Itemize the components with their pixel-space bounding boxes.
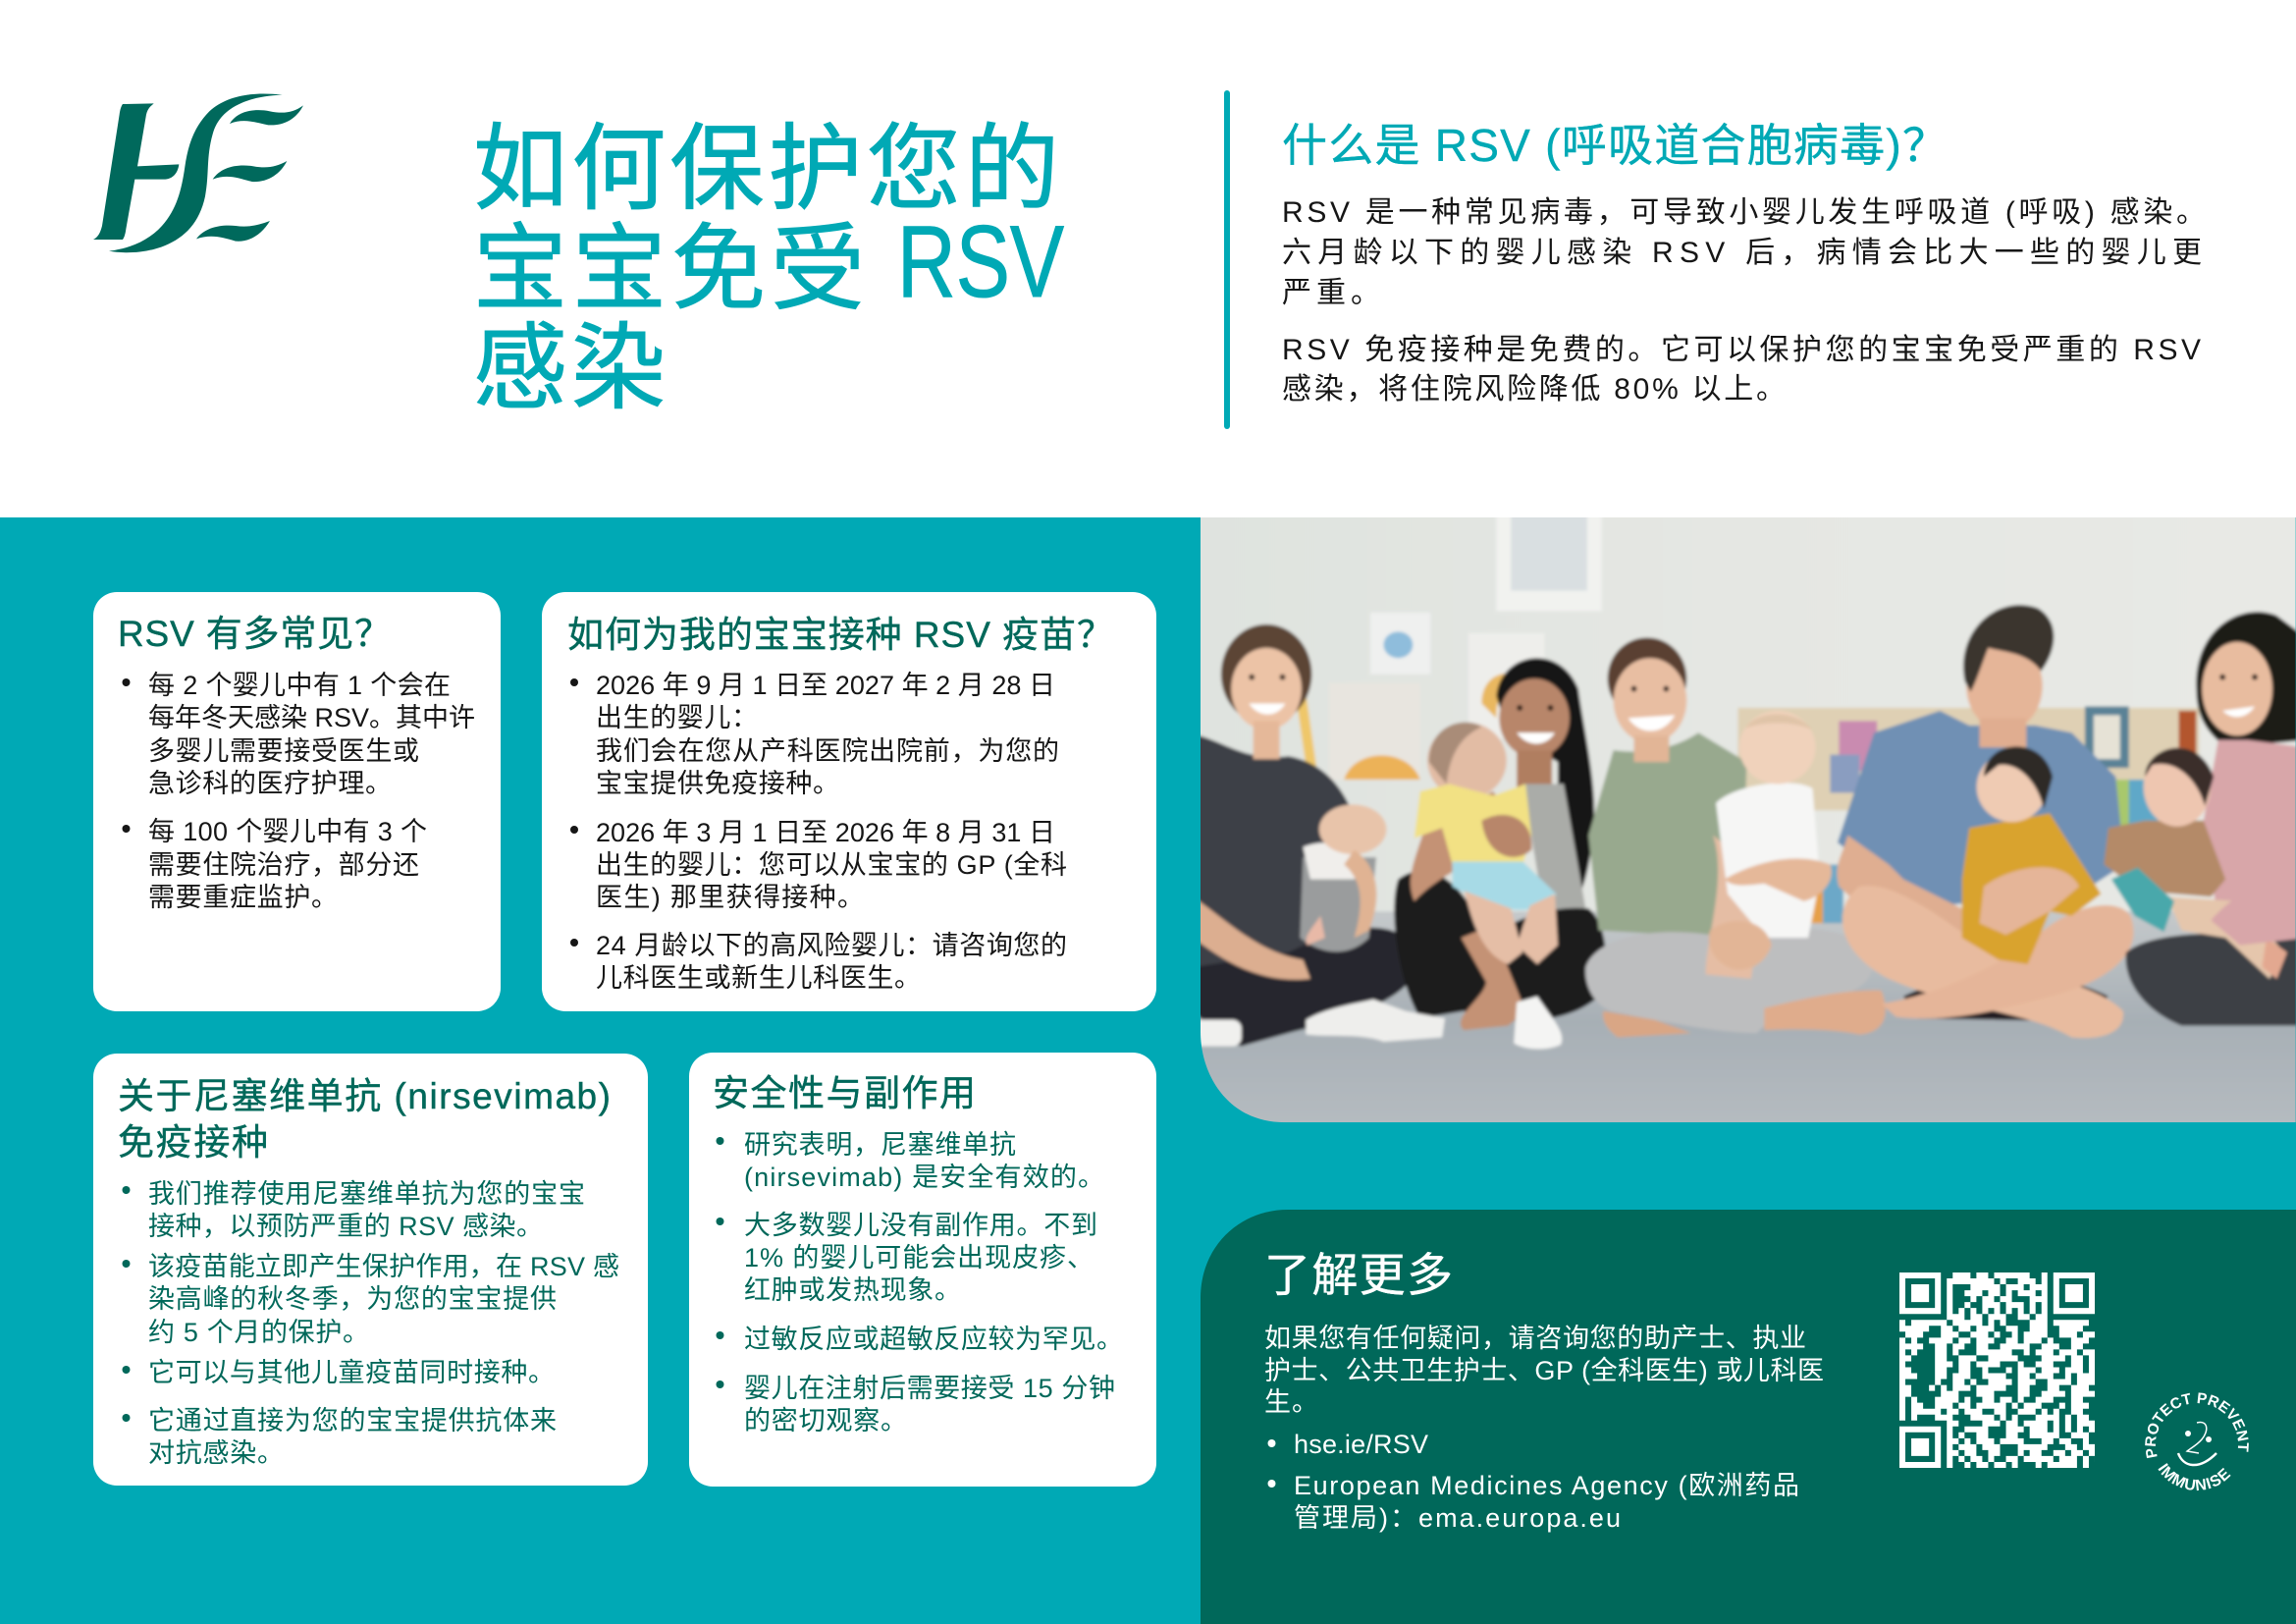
bullets: how common xyxy=(122,671,475,912)
person 2 xyxy=(1496,658,1594,896)
bullets: about nirsevimab: 该疫苗能立即产生保护作用，在 RSV 感 xyxy=(148,1252,619,1281)
bullets: how common: 多婴儿需要接受医生或 xyxy=(148,736,419,766)
bullets: safety: 红肿或发热现象。 xyxy=(744,1275,961,1305)
text block: RSV description: 感染，将住院风险降低 80% 以上。 xyxy=(1282,373,1786,406)
bullets: how common: 急诊科的医疗护理。 xyxy=(148,769,392,798)
bullets: about nirsevimab: 我们推荐使用尼塞维单抗为您的宝宝 xyxy=(148,1179,585,1209)
bullets: how to immunise: 2026 年 9 月 1 日至 2027 年 2 月 28 日 xyxy=(596,671,1055,700)
title: RSV xyxy=(897,205,1064,319)
panel: safety and side effects xyxy=(689,1053,1156,1487)
icon: Protect Prevent Immunise badge: IMMUNISE xyxy=(2158,1463,2230,1490)
bullets: how common: 每 2 个婴儿中有 1 个会在 xyxy=(148,671,451,700)
bullets: how to immunise: 出生的婴儿：您可以从宝宝的 GP (全科 xyxy=(596,850,1067,880)
QR code xyxy=(1899,1272,2101,1468)
bullets: about nirsevimab xyxy=(122,1179,619,1468)
text block: RSV description xyxy=(1282,196,2206,406)
bullets: how to immunise: 儿科医生或新生儿科医生。 xyxy=(596,963,921,993)
title xyxy=(473,117,1064,421)
bullets: links xyxy=(1268,1430,1799,1533)
heading: what is RSV: 什么是 RSV (呼吸道合胞病毒)？ xyxy=(1282,120,1948,171)
text block: RSV description: 严重。 xyxy=(1282,277,1380,309)
icon: Protect Prevent Immunise badge: PROTECT PREVENT xyxy=(2145,1392,2249,1459)
text block: contact details xyxy=(1264,1324,1824,1417)
heading: about nirsevimab: 关于尼塞维单抗 (nirsevimab) xyxy=(118,1076,611,1116)
bullets: how to immunise: 24 月龄以下的高风险婴儿：请咨询您的 xyxy=(596,931,1067,960)
bullets: how common: 每 100 个婴儿中有 3 个 xyxy=(148,817,427,846)
text block: RSV description: RSV 免疫接种是免费的。它可以保护您的宝宝免受严重的 RSV xyxy=(1282,334,2201,366)
heading: how common: RSV 有多常见？ xyxy=(118,614,391,654)
bullets: how to immunise xyxy=(570,671,1067,993)
heading: safety: 安全性与副作用 xyxy=(713,1073,976,1113)
title: 宝宝免受 xyxy=(473,217,865,322)
icon: Protect Prevent Immunise badge xyxy=(2145,1392,2249,1490)
panel: how common is RSV xyxy=(93,592,501,1011)
bullets: safety xyxy=(717,1130,1123,1435)
bullets: how to immunise: 医生) 那里获得接种。 xyxy=(596,883,864,912)
text block: contact details: 生。 xyxy=(1264,1387,1318,1417)
text block: RSV description: RSV 是一种常见病毒，可导致小婴儿发生呼吸道 (呼吸) 感染。 xyxy=(1282,196,2206,229)
bullets: safety: 研究表明，尼塞维单抗 xyxy=(744,1130,1016,1160)
heading: how to immunise: 如何为我的宝宝接种 RSV 疫苗？ xyxy=(567,615,1113,655)
bullets: safety: 1% 的婴儿可能会出现皮疹、 xyxy=(744,1243,1094,1272)
heading: about nirsevimab xyxy=(118,1076,611,1163)
person 3 xyxy=(1588,732,1746,938)
panel: what is RSV xyxy=(1282,120,2206,406)
bullets: about nirsevimab: 它通过直接为您的宝宝提供抗体来 xyxy=(148,1406,557,1435)
bullets: safety: 大多数婴儿没有副作用。不到 xyxy=(744,1211,1097,1240)
HSE logo xyxy=(93,94,303,252)
bullets: how to immunise: 我们会在您从产科医院出院前，为您的 xyxy=(596,736,1059,766)
heading: find out more: 了解更多 xyxy=(1264,1249,1453,1301)
heading: about nirsevimab: 免疫接种 xyxy=(118,1122,268,1163)
text block: contact details: 如果您有任何疑问，请咨询您的助产士、执业 xyxy=(1264,1324,1806,1353)
person 5 xyxy=(2196,612,2296,747)
bullets: how to immunise: 2026 年 3 月 1 日至 2026 年 8 月 31 日 xyxy=(596,818,1055,847)
bullets: how to immunise: 出生的婴儿： xyxy=(596,703,758,732)
title: 如何保护您的 xyxy=(473,117,1059,222)
person 1 xyxy=(1194,734,1353,974)
bullets: about nirsevimab: 对抗感染。 xyxy=(148,1438,284,1468)
panel: how to immunise my baby xyxy=(542,592,1156,1011)
bullets: safety: (nirsevimab) 是安全有效的。 xyxy=(744,1163,1104,1192)
teal background band xyxy=(0,517,2296,1624)
bullets: about nirsevimab: 接种，以预防严重的 RSV 感染。 xyxy=(148,1212,543,1241)
bullets: links: European Medicines Agency (欧洲药品 xyxy=(1294,1471,1799,1500)
text block: contact details: 护士、公共卫生护士、GP (全科医生) 或儿科医 xyxy=(1264,1356,1824,1385)
bullets: safety: 的密切观察。 xyxy=(744,1406,907,1435)
bullets: how to immunise: 宝宝提供免疫接种。 xyxy=(596,769,839,798)
bullets: links: hse.ie/RSV xyxy=(1294,1430,1428,1459)
panel: about nirsevimab xyxy=(93,1054,648,1486)
panel: find out more xyxy=(1201,1210,2296,1624)
photo: parents with babies xyxy=(1194,511,2296,1131)
text block: RSV description: 六月龄以下的婴儿感染 RSV 后，病情会比大一些的婴儿更 xyxy=(1282,237,2202,269)
title: 感染 xyxy=(473,316,666,421)
bullets: how common: 需要住院治疗，部分还 xyxy=(148,850,419,880)
person 4 xyxy=(1838,711,2124,908)
bullets: safety: 婴儿在注射后需要接受 15 分钟 xyxy=(744,1374,1115,1403)
divider xyxy=(1224,90,1230,429)
bullets: about nirsevimab: 染高峰的秋冬季，为您的宝宝提供 xyxy=(148,1284,557,1314)
bullets: about nirsevimab: 约 5 个月的保护。 xyxy=(148,1318,369,1347)
bullets: how common: 需要重症监护。 xyxy=(148,883,338,912)
bullets: how common: 每年冬天感染 RSV。其中许 xyxy=(148,703,475,732)
bullets: about nirsevimab: 它可以与其他儿童疫苗同时接种。 xyxy=(148,1358,555,1387)
bullets: links: 管理局)：ema.europa.eu xyxy=(1294,1503,1621,1533)
bullets: safety: 过敏反应或超敏反应较为罕见。 xyxy=(744,1325,1123,1354)
